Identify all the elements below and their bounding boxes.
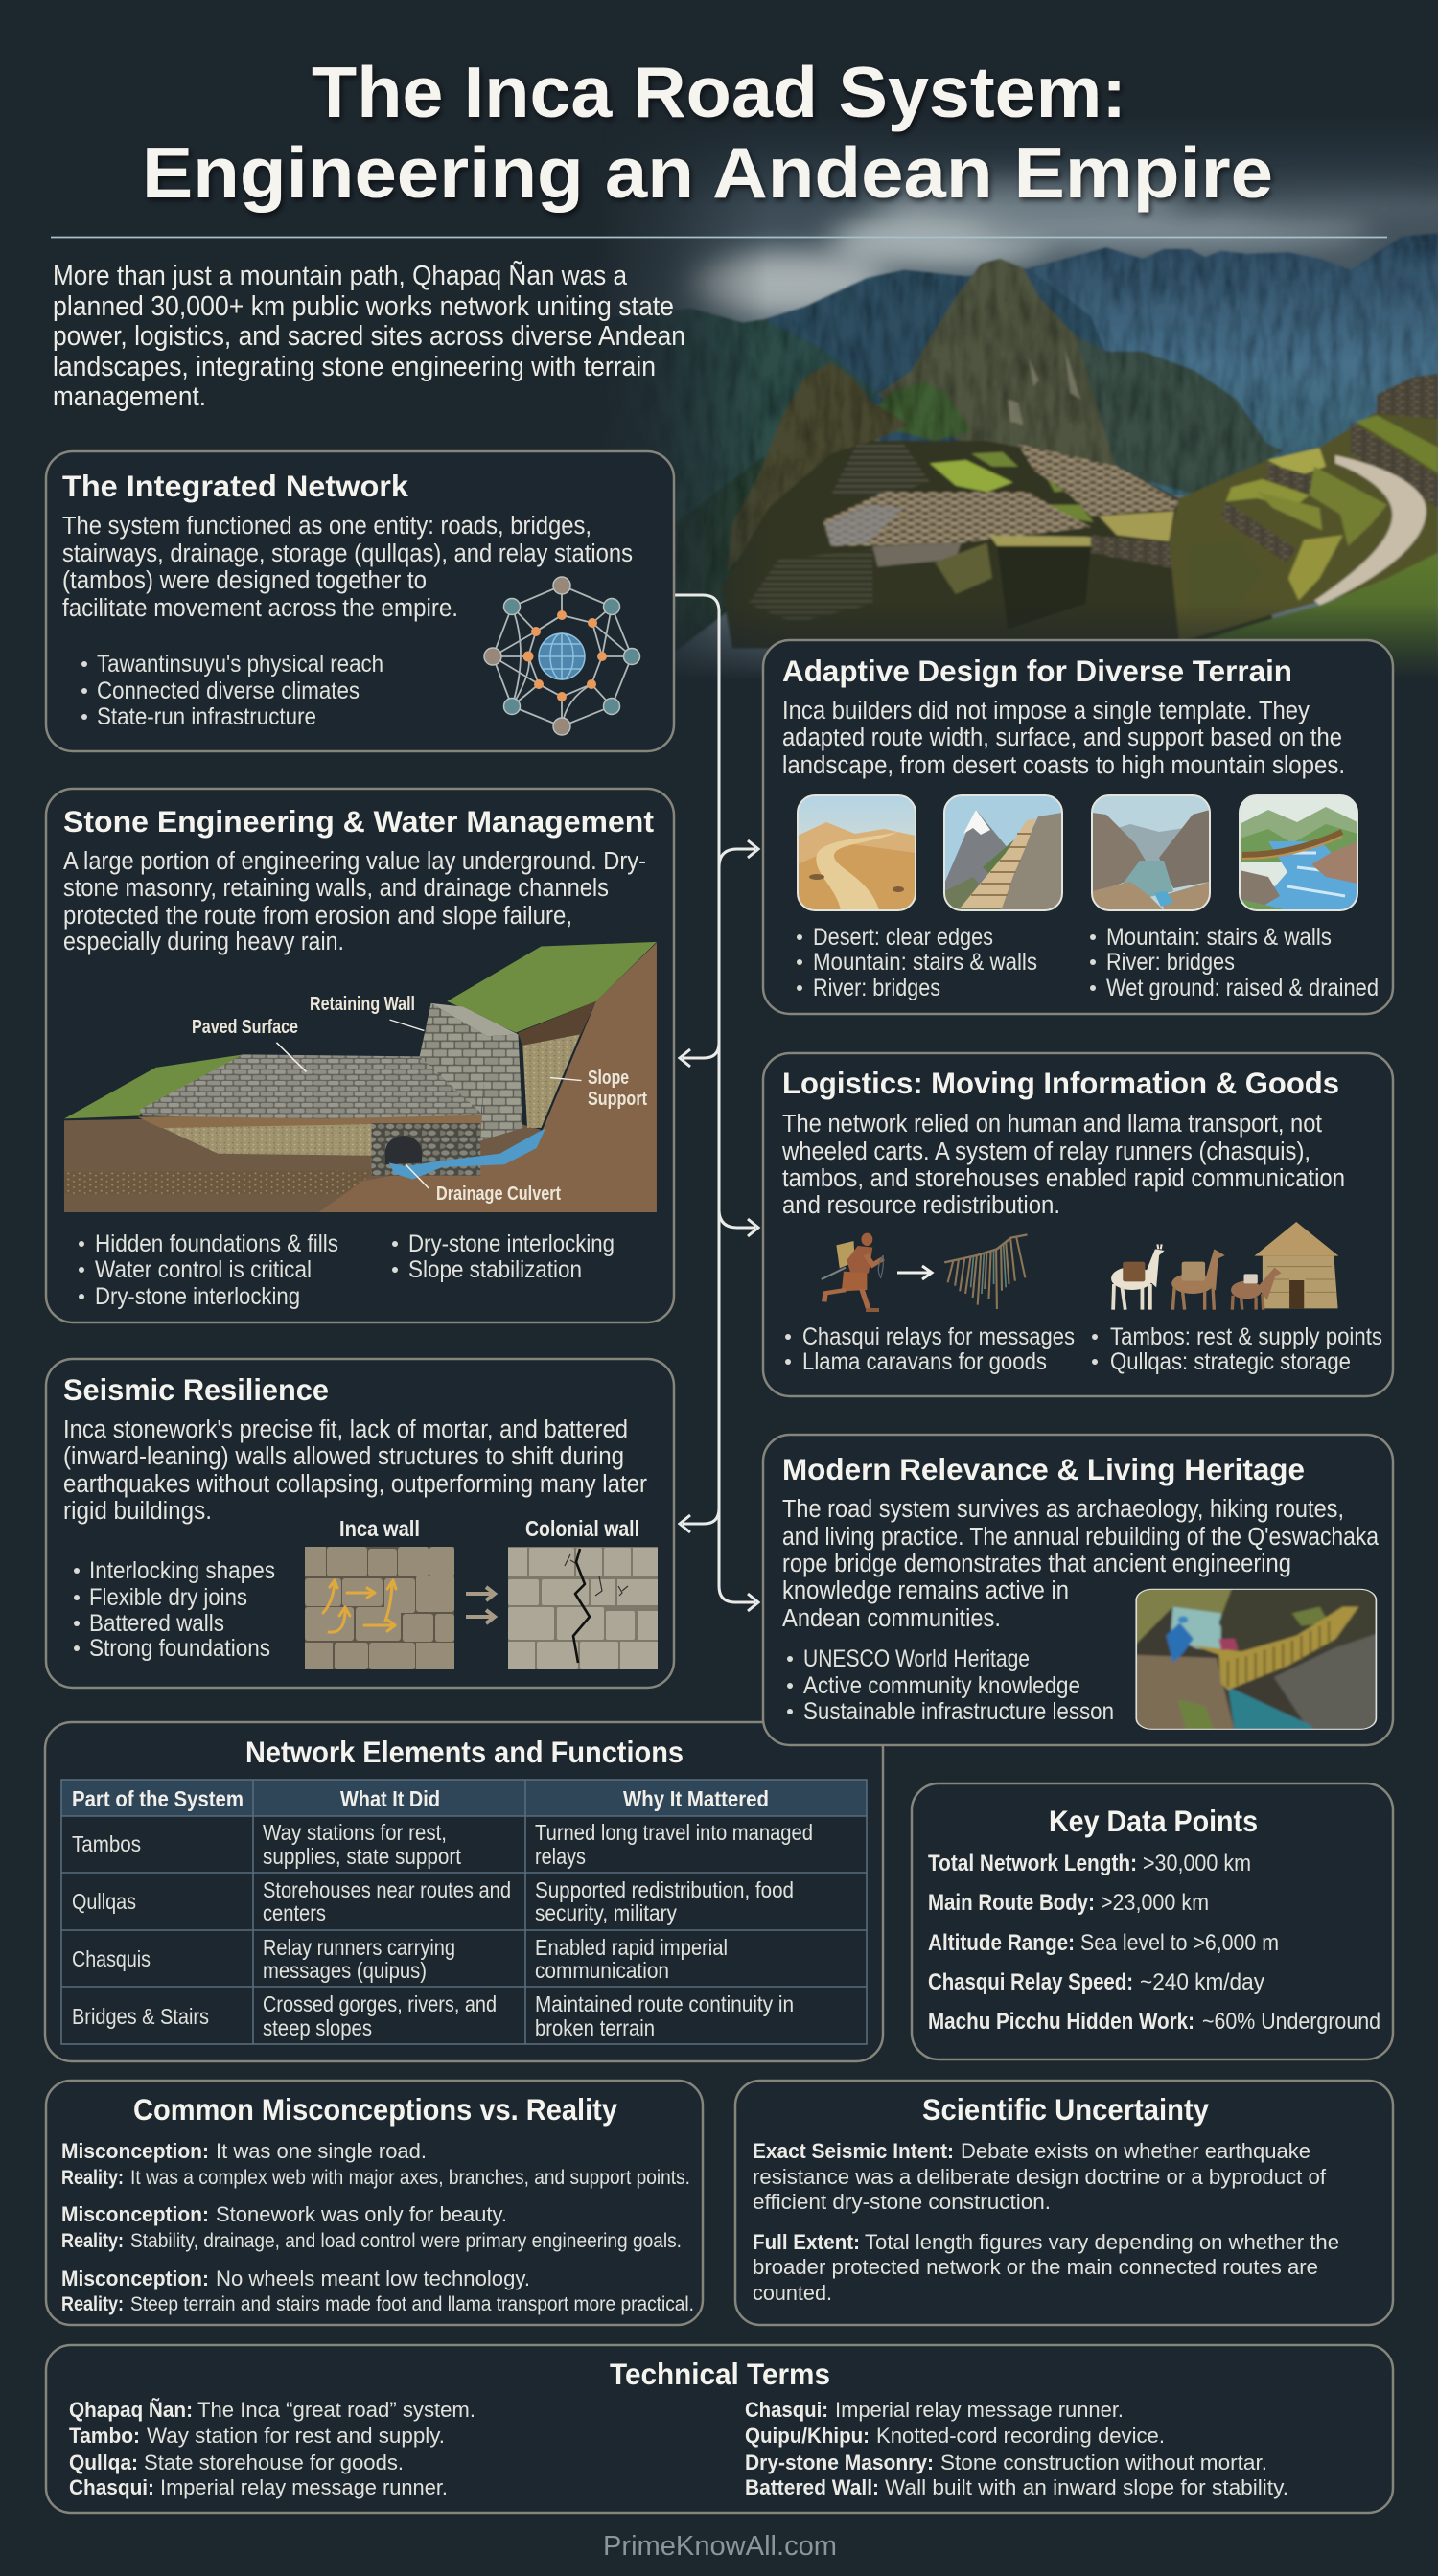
bullet list: terrain left: River: bridges bbox=[813, 975, 940, 1001]
misconception 2: Stonework was only for beauty. bbox=[216, 2202, 507, 2226]
intro text: landscapes, integrating stone engineering with terrain bbox=[53, 352, 656, 382]
bullet list: stone engineering: Water control is critical bbox=[95, 1256, 312, 1283]
data: altitude range bbox=[928, 1930, 1279, 1956]
table: network elements and functions: Way stations for rest, bbox=[263, 1820, 447, 1845]
text: adaptive body bbox=[782, 698, 1345, 779]
terms: right column: Stone construction without mortar. bbox=[940, 2450, 1267, 2474]
text: stone engineering body: A large portion of engineering value lay underground. Dry- bbox=[63, 848, 646, 875]
terms: right column bbox=[745, 2398, 1288, 2499]
misconception 1: It was a complex web with major axes, branches, and support points. bbox=[130, 2167, 690, 2189]
misconception 3: Misconception: bbox=[61, 2266, 209, 2290]
table: network elements and functions: Crossed gorges, rivers, and bbox=[263, 1991, 497, 2016]
heading: network elements: Network Elements and Functions bbox=[245, 1735, 684, 1769]
title: Engineering an Andean Empire bbox=[142, 132, 1273, 213]
misconception 1 bbox=[61, 2139, 690, 2189]
bullet list: stone engineering: Dry-stone interlocking bbox=[408, 1230, 615, 1257]
intro text: More than just a mountain path, Qhapaq Ñan was a bbox=[53, 261, 627, 291]
terms: left column: Qullqa: bbox=[69, 2450, 138, 2474]
data: main route body: Main Route Body: bbox=[928, 1890, 1095, 1916]
text: seismic body bbox=[63, 1416, 647, 1525]
bullet list: terrain right bbox=[1090, 924, 1379, 1001]
bullet list: terrain left: Mountain: stairs & walls bbox=[813, 949, 1037, 976]
text: exact seismic intent bbox=[753, 2139, 1327, 2214]
bullet list: logistics left bbox=[785, 1323, 1075, 1375]
diagram: road cross-section bbox=[64, 942, 657, 1212]
table: network elements and functions: steep slopes bbox=[263, 2015, 372, 2040]
misconception 3: Reality: bbox=[61, 2293, 124, 2315]
bullet list: stone engineering: Hidden foundations & fills bbox=[95, 1230, 338, 1257]
panel: seismic resilience bbox=[46, 1359, 674, 1688]
text: exact seismic intent: Exact Seismic Intent: bbox=[753, 2139, 954, 2163]
bullet list: terrain left bbox=[797, 924, 1037, 1001]
bullet list: logistics left: Llama caravans for goods bbox=[802, 1348, 1047, 1375]
data: main route body: >23,000 km bbox=[1101, 1890, 1209, 1916]
label: colonial wall: Colonial wall bbox=[525, 1516, 639, 1541]
intro text: power, logistics, and sacred sites across diverse Andean bbox=[53, 321, 685, 352]
bullet list: integrated network: Tawantinsuyu's physical reach bbox=[97, 651, 383, 678]
bullet list: integrated network: Connected diverse climates bbox=[97, 678, 360, 704]
data: machu picchu hidden work: Machu Picchu Hidden Work: bbox=[928, 2009, 1194, 2035]
bullet list: stone engineering bbox=[79, 1230, 615, 1310]
terms: left column: State storehouse for goods. bbox=[144, 2450, 404, 2474]
table: network elements and functions bbox=[61, 1780, 867, 2044]
text: integrated network body: The system functioned as one entity: roads, bridges, bbox=[62, 513, 591, 540]
table: network elements and functions: Part of the System bbox=[72, 1786, 244, 1811]
bullet list: logistics left: Chasqui relays for messages bbox=[802, 1323, 1075, 1350]
text: full extent bbox=[753, 2230, 1339, 2305]
misconception 2: Reality: bbox=[61, 2230, 124, 2252]
illustration: inca wall bbox=[305, 1547, 454, 1669]
bullet list: terrain right: River: bridges bbox=[1106, 949, 1235, 976]
misconception 1: Reality: bbox=[61, 2167, 124, 2189]
heading: modern relevance: Modern Relevance & Living Heritage bbox=[782, 1452, 1305, 1486]
hero image: Machu Picchu landscape bbox=[0, 0, 1438, 709]
bullet list: terrain right: Mountain: stairs & walls bbox=[1106, 924, 1332, 951]
text: stone engineering body: stone masonry, retaining walls, and drainage channels bbox=[63, 875, 609, 902]
heading: technical terms: Technical Terms bbox=[610, 2357, 830, 2391]
data: altitude range: Sea level to >6,000 m bbox=[1080, 1930, 1279, 1956]
terms: right column: Wall built with an inward slope for stability. bbox=[885, 2475, 1288, 2499]
intro text: management. bbox=[53, 381, 206, 412]
panel: the integrated network bbox=[46, 451, 674, 751]
icon: chasqui runner bbox=[822, 1233, 883, 1312]
label: drainage culvert: Drainage Culvert bbox=[436, 1184, 561, 1205]
heading: integrated network: The Integrated Network bbox=[62, 469, 408, 503]
table: network elements and functions: messages (quipus) bbox=[263, 1958, 427, 1983]
connector arrows bbox=[675, 595, 758, 1611]
bullet list: integrated network bbox=[81, 651, 383, 730]
text: logistics body: The network relied on human and llama transport, not bbox=[782, 1111, 1322, 1138]
icon: mountain stairs bbox=[944, 795, 1062, 910]
table: network elements and functions: Maintained route continuity in bbox=[535, 1991, 794, 2016]
terms: right column: Knotted-cord recording device. bbox=[876, 2424, 1165, 2448]
text: seismic body: earthquakes without collapsing, outperforming many later bbox=[63, 1471, 647, 1498]
table: network elements and functions: What It Did bbox=[340, 1786, 440, 1811]
table: network elements and functions: communication bbox=[535, 1958, 669, 1983]
bullet list: seismic: Battered walls bbox=[89, 1610, 224, 1637]
misconception 3: Steep terrain and stairs made foot and llama transport more practical. bbox=[130, 2293, 694, 2315]
text: seismic body: (inward-leaning) walls allowed structures to shift during bbox=[63, 1443, 624, 1470]
text: exact seismic intent: Debate exists on whether earthquake bbox=[961, 2139, 1310, 2163]
table: network elements and functions: Supported redistribution, food bbox=[535, 1877, 794, 1902]
text: integrated network body bbox=[62, 513, 633, 622]
text: modern relevance body: The road system survives as archaeology, hiking routes, bbox=[782, 1496, 1344, 1523]
heading: stone engineering: Stone Engineering & Water Management bbox=[63, 804, 655, 839]
title: The Inca Road System: bbox=[312, 52, 1126, 132]
arrow: message relay bbox=[897, 1266, 932, 1279]
arrows: inca to colonial bbox=[466, 1587, 495, 1623]
bullet list: terrain left: Desert: clear edges bbox=[813, 924, 993, 951]
panel: adaptive design for diverse terrain bbox=[763, 640, 1393, 1014]
text: full extent: counted. bbox=[753, 2281, 832, 2305]
text: exact seismic intent: efficient dry-stone construction. bbox=[753, 2190, 1051, 2214]
misconception 3 bbox=[61, 2266, 694, 2315]
intro text: planned 30,000+ km public works network uniting state bbox=[53, 291, 674, 322]
text: logistics body: and resource redistribution. bbox=[782, 1192, 1060, 1219]
bullet list: seismic: Flexible dry joins bbox=[89, 1584, 247, 1611]
heading: adaptive design: Adaptive Design for Diverse Terrain bbox=[782, 654, 1292, 688]
label: retaining wall: Retaining Wall bbox=[310, 994, 415, 1015]
text: full extent: broader protected network or the main connected routes are bbox=[753, 2255, 1318, 2279]
terms: left column: Qhapaq Ñan: bbox=[69, 2398, 193, 2422]
illustration: colonial wall bbox=[508, 1547, 658, 1669]
terms: right column: Battered Wall: bbox=[745, 2475, 879, 2499]
icon: network globe bbox=[484, 577, 640, 735]
bullet list: logistics right: Qullqas: strategic storage bbox=[1110, 1348, 1351, 1375]
heading: logistics: Logistics: Moving Information & Goods bbox=[782, 1066, 1339, 1100]
text: logistics body: wheeled carts. A system of relay runners (chasquis), bbox=[781, 1138, 1310, 1165]
table: network elements and functions: Bridges & Stairs bbox=[72, 2004, 209, 2029]
misconception 3: No wheels meant low technology. bbox=[216, 2266, 530, 2290]
table: network elements and functions: security, military bbox=[535, 1900, 677, 1925]
table: network elements and functions: Enabled rapid imperial bbox=[535, 1935, 728, 1960]
misconception 2: Misconception: bbox=[61, 2202, 209, 2226]
heading: scientific uncertainty: Scientific Uncertainty bbox=[922, 2092, 1209, 2127]
text: full extent: Total length figures vary depending on whether the bbox=[865, 2230, 1339, 2254]
terms: right column: Quipu/Khipu: bbox=[745, 2424, 870, 2448]
text: stone engineering body: especially during heavy rain. bbox=[63, 929, 344, 955]
misconception 2: Stability, drainage, and load control were primary engineering goals. bbox=[130, 2230, 682, 2252]
bullet list: modern relevance: UNESCO World Heritage bbox=[803, 1645, 1030, 1672]
icon: quipu bbox=[944, 1234, 1027, 1309]
text: seismic body: Inca stonework's precise fit, lack of mortar, and battered bbox=[63, 1416, 628, 1443]
panel: network elements table bbox=[45, 1722, 883, 2061]
text: integrated network body: stairways, drainage, storage (qullqas), and relay stations bbox=[62, 540, 633, 567]
bullet list: logistics right: Tambos: rest & supply points bbox=[1110, 1323, 1382, 1350]
bullet list: stone engineering: Slope stabilization bbox=[408, 1256, 582, 1283]
terms: right column: Imperial relay message runner. bbox=[835, 2398, 1124, 2422]
bullet list: seismic: Interlocking shapes bbox=[89, 1557, 275, 1584]
terms: left column: The Inca “great road” system. bbox=[197, 2398, 475, 2422]
intro text bbox=[53, 261, 685, 412]
table: network elements and functions: Relay runners carrying bbox=[263, 1935, 455, 1960]
text: integrated network body: (tambos) were designed together to bbox=[62, 567, 427, 594]
table: network elements and functions: centers bbox=[263, 1900, 326, 1925]
text: adaptive body: adapted route width, surface, and support based on the bbox=[782, 724, 1342, 751]
panel: logistics bbox=[763, 1053, 1393, 1396]
text: logistics body bbox=[781, 1111, 1345, 1219]
data: machu picchu hidden work bbox=[928, 2009, 1380, 2035]
text: exact seismic intent: resistance was a deliberate design doctrine or a byproduct of bbox=[753, 2165, 1327, 2189]
data: altitude range: Altitude Range: bbox=[928, 1930, 1075, 1956]
icon: river gorge bbox=[1092, 795, 1210, 910]
table: network elements and functions: supplies, state support bbox=[263, 1844, 462, 1869]
label: slope support: Support bbox=[588, 1089, 647, 1110]
heading: seismic resilience: Seismic Resilience bbox=[63, 1372, 329, 1407]
data: total network length: Total Network Length: bbox=[928, 1851, 1137, 1876]
text: adaptive body: landscape, from desert coasts to high mountain slopes. bbox=[782, 752, 1345, 779]
misconception 1: Misconception: bbox=[61, 2139, 209, 2163]
label: paved surface: Paved Surface bbox=[192, 1017, 298, 1038]
misconception 2 bbox=[61, 2202, 682, 2252]
text: modern relevance body bbox=[782, 1496, 1380, 1632]
text: full extent: Full Extent: bbox=[753, 2230, 860, 2254]
footer: PrimeKnowAll.com bbox=[603, 2531, 837, 2562]
terms: right column: Dry-stone Masonry: bbox=[745, 2450, 934, 2474]
text: stone engineering body: protected the route from erosion and slope failure, bbox=[63, 903, 572, 930]
bullet list: seismic bbox=[74, 1557, 275, 1662]
text: modern relevance body: knowledge remains active in bbox=[782, 1577, 1069, 1604]
bullet list: stone engineering: Dry-stone interlocking bbox=[95, 1283, 300, 1310]
data: machu picchu hidden work: ~60% Underground bbox=[1202, 2009, 1380, 2035]
label: inca wall: Inca wall bbox=[339, 1516, 420, 1541]
bullet list: seismic: Strong foundations bbox=[89, 1635, 270, 1662]
icon: llama caravan bbox=[1111, 1222, 1338, 1310]
heading: misconceptions: Common Misconceptions vs. Reality bbox=[133, 2092, 617, 2127]
terms: left column: Tambo: bbox=[69, 2424, 140, 2448]
text: integrated network body: facilitate movement across the empire. bbox=[62, 595, 458, 622]
heading: key data points: Key Data Points bbox=[1049, 1804, 1258, 1838]
bullet list: modern relevance bbox=[787, 1645, 1114, 1725]
icon: desert road bbox=[798, 795, 916, 910]
title divider bbox=[51, 236, 1387, 238]
table: network elements and functions: Storehouses near routes and bbox=[263, 1877, 511, 1902]
misconception 1: It was one single road. bbox=[216, 2139, 427, 2163]
terms: right column: Chasqui: bbox=[745, 2398, 828, 2422]
panel: scientific uncertainty bbox=[735, 2081, 1393, 2325]
text: logistics body: tambos, and storehouses enabled rapid communication bbox=[782, 1165, 1345, 1192]
table: network elements and functions: Turned long travel into managed bbox=[535, 1820, 813, 1845]
panel: modern relevance and living heritage bbox=[763, 1435, 1393, 1745]
text: adaptive body: Inca builders did not impose a single template. They bbox=[782, 698, 1310, 724]
table: network elements and functions: Chasquis bbox=[72, 1946, 151, 1971]
bullet list: integrated network: State-run infrastructure bbox=[97, 703, 316, 730]
text: stone engineering body bbox=[63, 848, 646, 955]
bullet list: modern relevance: Sustainable infrastructure lesson bbox=[803, 1698, 1114, 1725]
terms: left column: Way station for rest and supply. bbox=[147, 2424, 445, 2448]
table: network elements and functions: Qullqas bbox=[72, 1889, 136, 1914]
bullet list: modern relevance: Active community knowledge bbox=[803, 1672, 1080, 1699]
bullet list: terrain right: Wet ground: raised & drained bbox=[1106, 975, 1379, 1001]
text: seismic body: rigid buildings. bbox=[63, 1498, 212, 1525]
text: modern relevance body: rope bridge demonstrates that ancient engineering bbox=[782, 1551, 1291, 1577]
panel: key data points bbox=[912, 1783, 1393, 2059]
label: slope support: Slope bbox=[588, 1068, 629, 1089]
terms: left column bbox=[69, 2398, 475, 2499]
table: network elements and functions: Tambos bbox=[72, 1831, 141, 1856]
data: total network length: >30,000 km bbox=[1143, 1851, 1251, 1876]
title bbox=[142, 52, 1273, 213]
panel: technical terms bbox=[46, 2345, 1393, 2513]
photo: Q'eswachaka rope bridge bbox=[1131, 1586, 1380, 1733]
bullet list: logistics right bbox=[1092, 1323, 1382, 1375]
data: chasqui relay speed: ~240 km/day bbox=[1140, 1969, 1264, 1995]
table: network elements and functions: broken terrain bbox=[535, 2015, 655, 2040]
icon: rope bridge over river bbox=[1240, 795, 1357, 910]
label: slope support bbox=[588, 1068, 647, 1110]
panel: common misconceptions vs reality bbox=[46, 2081, 703, 2325]
data: main route body bbox=[928, 1890, 1209, 1916]
text: modern relevance body: Andean communities. bbox=[782, 1605, 1001, 1632]
table: network elements and functions: Why It Mattered bbox=[623, 1786, 769, 1811]
terms: left column: Chasqui: bbox=[69, 2475, 154, 2499]
text: modern relevance body: and living practice. The annual rebuilding of the Q'eswachaka bbox=[782, 1524, 1380, 1551]
table: network elements and functions: relays bbox=[535, 1844, 586, 1869]
data: chasqui relay speed: Chasqui Relay Speed: bbox=[928, 1969, 1133, 1995]
panel: stone engineering and water management bbox=[46, 789, 674, 1322]
terms: left column: Imperial relay message runner. bbox=[160, 2475, 448, 2499]
